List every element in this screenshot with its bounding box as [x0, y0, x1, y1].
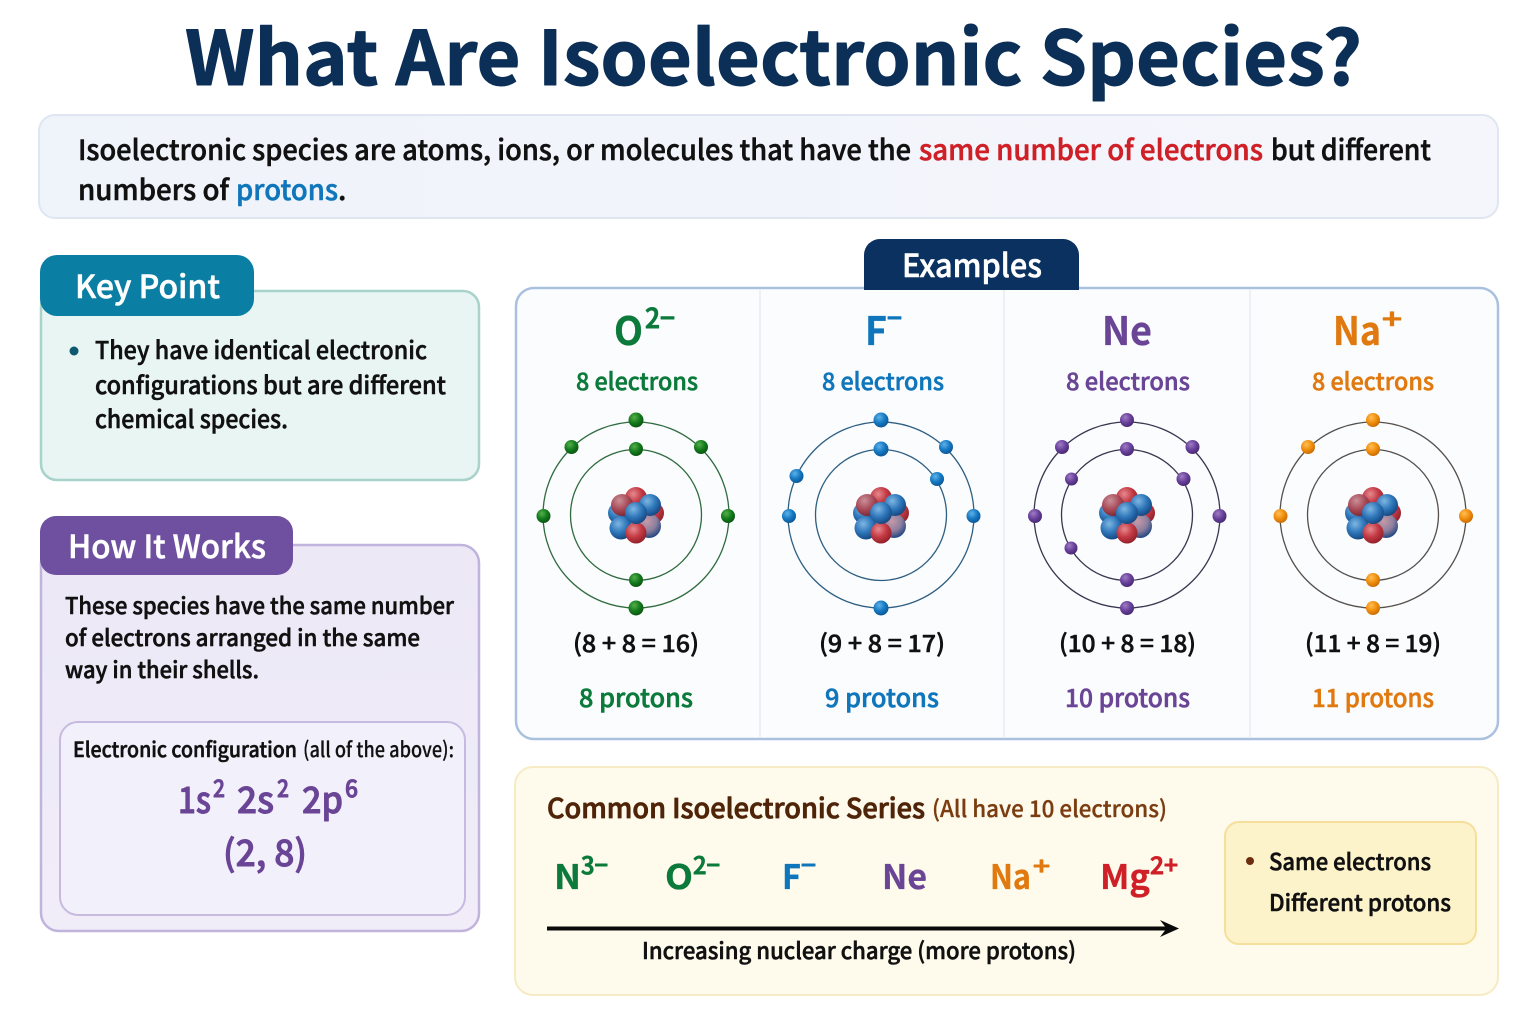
series species row: O: [665, 850, 693, 899]
summary box: Same electrons: [1269, 843, 1431, 877]
atom diagram Ne: [1028, 413, 1226, 615]
examples tab: [864, 239, 1079, 290]
how it works tab: [40, 516, 293, 575]
panel: examples: [516, 239, 1498, 739]
symbol F-: [865, 297, 902, 357]
series species row: F: [782, 850, 801, 899]
panel: common isoelectronic series: [515, 767, 1498, 995]
configuration formula: 2: [277, 769, 289, 804]
column: Na+: [1274, 298, 1473, 715]
electron count F-: 8 electrons: [822, 362, 944, 397]
definition banner: .: [338, 169, 346, 209]
definition banner: same number of electrons: [919, 129, 1263, 169]
series species row: [554, 846, 1178, 899]
column: F-: [782, 297, 980, 715]
atom diagram Na+: [1274, 413, 1473, 615]
examples heading: Examples: [902, 241, 1042, 287]
arrow: increasing nuclear charge: [547, 920, 1179, 937]
series heading: Common Isoelectronic Series: [547, 787, 925, 826]
series heading: (All have 10 electrons): [932, 790, 1167, 824]
panel: how it works: [40, 516, 479, 931]
definition banner: [39, 115, 1498, 218]
definition banner: protons: [236, 169, 338, 209]
configuration formula: 2p: [302, 772, 343, 824]
electron count O2-: 8 electrons: [576, 362, 698, 397]
series species row: 2+: [1150, 846, 1178, 881]
symbol O2-: O: [614, 301, 643, 357]
summary box: Different protons: [1269, 884, 1451, 918]
configuration formula: [178, 769, 358, 877]
title: What Are Isoelectronic Species?: [185, 0, 1362, 107]
series species row: N: [554, 850, 581, 899]
bullet: [70, 346, 78, 356]
series species row: Na: [990, 850, 1031, 899]
symbol O2-: [614, 297, 675, 357]
series species row: Ne: [882, 850, 927, 899]
atom diagram F-: [782, 412, 980, 616]
symbol Na+: +: [1382, 298, 1402, 337]
electronic configuration box: [60, 722, 465, 915]
electron count Na+: 8 electrons: [1312, 362, 1434, 397]
how it works text: [65, 587, 455, 685]
proton sum F-: (9 + 8 = 17): [819, 624, 945, 659]
definition banner: Isoelectronic species are atoms, ions, or molecules that have the: [78, 129, 911, 169]
series heading: [547, 787, 1167, 826]
series species row: −: [801, 846, 816, 881]
configuration formula: 2: [213, 769, 225, 804]
atom diagram O2-: [536, 412, 735, 616]
column: Ne: [1028, 301, 1226, 715]
proton count F-: 9 protons: [825, 679, 939, 715]
configuration formula: 2s: [237, 772, 274, 824]
proton sum Ne: (10 + 8 = 18): [1059, 624, 1196, 659]
symbol F-: −: [887, 297, 902, 336]
how it works text: of electrons arranged in the same: [65, 619, 420, 653]
electronic configuration box: Electronic configuration: [73, 734, 297, 764]
key point heading: Key Point: [75, 262, 220, 308]
configuration formula: 6: [345, 769, 358, 804]
key point text: They have identical electronic: [95, 332, 427, 367]
key point text: configurations but are different: [95, 367, 446, 402]
configuration formula: 1s: [178, 772, 211, 824]
series species row: 2−: [693, 846, 720, 881]
series species row: Mg: [1100, 850, 1150, 899]
proton sum Na+: (11 + 8 = 19): [1305, 624, 1441, 659]
electron count Ne: 8 electrons: [1066, 362, 1190, 397]
key point text: [95, 332, 446, 436]
proton count Na+: 11 protons: [1312, 679, 1434, 715]
panel: key point: [40, 255, 479, 480]
key point tab: [40, 255, 254, 316]
configuration formula: (2, 8): [223, 825, 307, 877]
proton count O2-: 8 protons: [579, 679, 693, 715]
summary box: [1225, 822, 1476, 944]
proton sum O2-: (8 + 8 = 16): [573, 624, 699, 659]
key point text: chemical species.: [95, 401, 288, 436]
symbol Na+: Na: [1333, 301, 1381, 357]
symbol Ne: Ne: [1102, 301, 1152, 357]
electronic configuration box: (all of the above):: [303, 734, 454, 764]
how it works text: way in their shells.: [65, 651, 259, 685]
series species row: 3−: [581, 846, 608, 881]
arrow caption: Increasing nuclear charge (more protons): [642, 932, 1076, 966]
series species row: +: [1033, 847, 1050, 882]
definition banner: numbers of: [78, 169, 230, 209]
how it works heading: How It Works: [68, 522, 266, 568]
how it works text: These species have the same number: [65, 587, 455, 621]
proton count Ne: 10 protons: [1065, 679, 1190, 715]
symbol F-: F: [865, 301, 887, 357]
definition banner: but different: [1271, 129, 1431, 169]
column: O2-: [536, 297, 735, 715]
symbol O2-: 2−: [645, 297, 675, 336]
